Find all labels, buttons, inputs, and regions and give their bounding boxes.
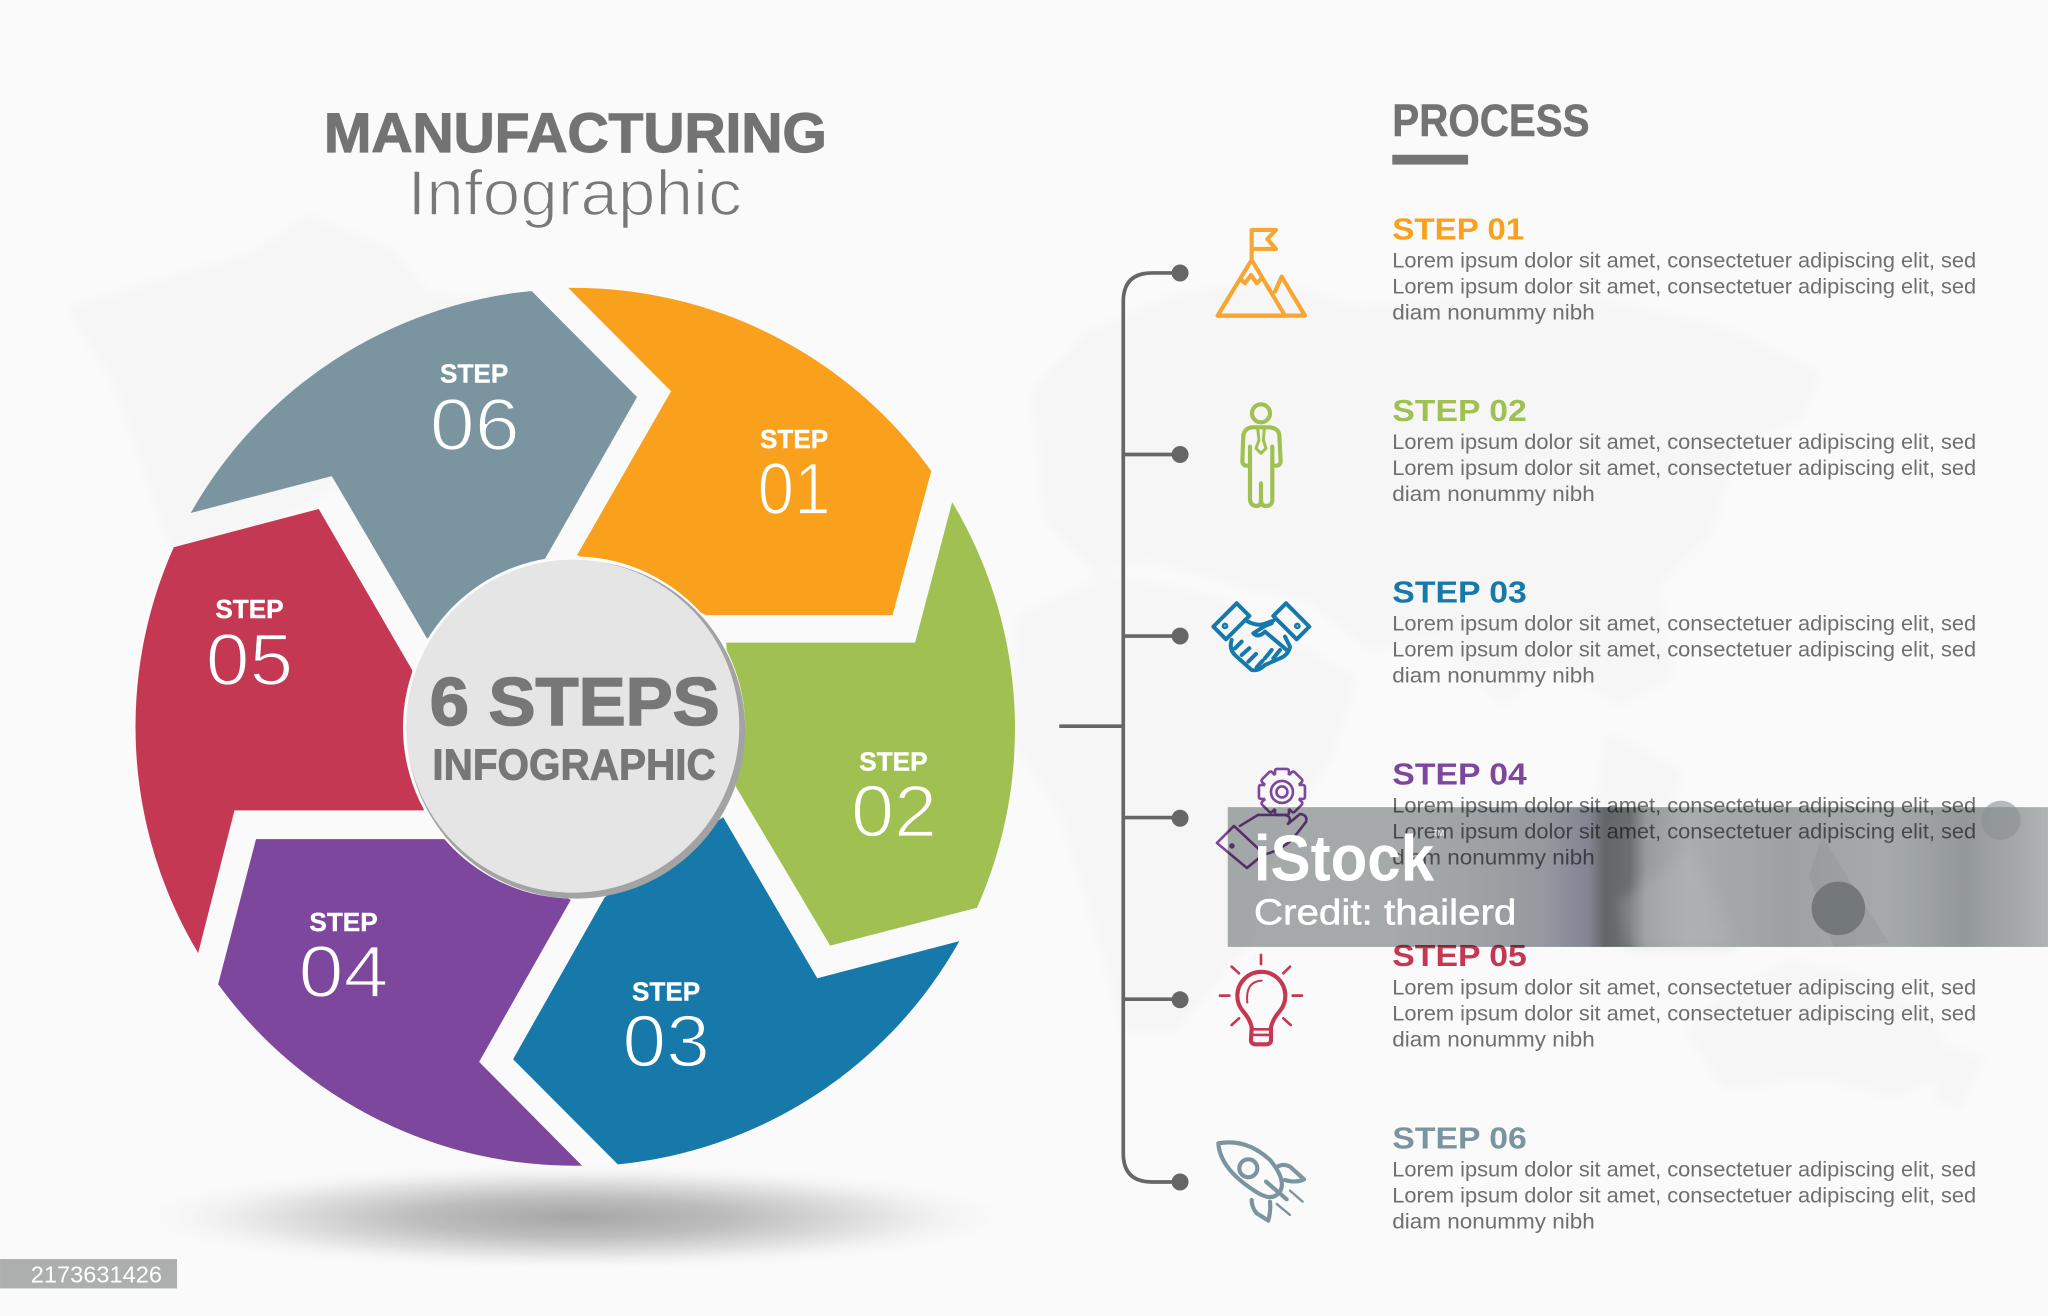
title: Infographic <box>408 157 742 229</box>
segment: step 02: 02 <box>851 772 937 853</box>
step 01 text: STEP 01 <box>1392 212 1524 247</box>
icon: businessman <box>1242 404 1281 506</box>
step 02 text: diam nonummy nibh <box>1392 481 1595 506</box>
step 01 text <box>1392 212 1976 325</box>
process heading: PROCESS <box>1392 95 1590 146</box>
step 04 text: STEP 04 <box>1392 756 1527 791</box>
step 03 text: STEP 03 <box>1392 575 1527 610</box>
segment: step 02 <box>726 502 1015 946</box>
step 03 text: Lorem ipsum dolor sit amet, consectetuer adipiscing elit, sed <box>1392 637 1976 662</box>
step 01 text: diam nonummy nibh <box>1392 300 1595 325</box>
step 05 text: Lorem ipsum dolor sit amet, consectetuer adipiscing elit, sed <box>1392 1000 1976 1025</box>
cycle diagram <box>136 288 1015 1166</box>
image id tag <box>0 1259 177 1288</box>
watermark band: iStock <box>1254 821 1435 894</box>
segment: step 04: STEP <box>309 907 378 937</box>
step 04 text: Lorem ipsum dolor sit amet, consectetuer adipiscing elit, sed <box>1392 818 1976 843</box>
segment: step 05: 05 <box>206 620 293 701</box>
segment: step 02: STEP <box>859 747 927 777</box>
step 05 text: Lorem ipsum dolor sit amet, consectetuer adipiscing elit, sed <box>1392 974 1976 999</box>
title <box>324 102 827 229</box>
step 04 text: Lorem ipsum dolor sit amet, consectetuer adipiscing elit, sed <box>1392 792 1976 817</box>
step 04 text: diam nonummy nibh <box>1392 845 1595 870</box>
segment: step 06: 06 <box>430 385 520 466</box>
step 06 text: Lorem ipsum dolor sit amet, consectetuer adipiscing elit, sed <box>1392 1156 1976 1181</box>
icon: light bulb <box>1220 955 1302 1044</box>
step 04 text <box>1392 756 1976 870</box>
step 06 text <box>1392 1121 1976 1234</box>
step 05 text <box>1392 938 1976 1052</box>
title: MANUFACTURING <box>324 102 827 164</box>
segment: step 03: STEP <box>632 976 700 1006</box>
center hub: 6 STEPS <box>430 665 720 740</box>
segment: step 04 <box>218 839 582 1166</box>
segment: step 01 <box>568 288 931 615</box>
center hub: INFOGRAPHIC <box>432 742 716 790</box>
step 05 text: STEP 05 <box>1392 938 1527 973</box>
segment: step 05 <box>136 509 424 953</box>
step 01 text: Lorem ipsum dolor sit amet, consectetuer adipiscing elit, sed <box>1392 273 1976 298</box>
watermark band: Credit: thailerd <box>1254 892 1516 933</box>
segment: step 04: 04 <box>298 932 389 1013</box>
segment: step 01: STEP <box>760 424 828 454</box>
connector tree <box>1059 264 1189 1190</box>
segment: step 05: STEP <box>215 594 284 624</box>
step 02 text: Lorem ipsum dolor sit amet, consectetuer adipiscing elit, sed <box>1392 455 1976 480</box>
step 05 text: diam nonummy nibh <box>1392 1027 1595 1052</box>
step 02 text: Lorem ipsum dolor sit amet, consectetuer adipiscing elit, sed <box>1392 429 1976 454</box>
ground shadow <box>124 1162 1025 1272</box>
segment: step 06 <box>191 291 637 639</box>
step 06 text: diam nonummy nibh <box>1392 1209 1595 1234</box>
segment: step 06: STEP <box>440 359 508 389</box>
icon: gear in hand <box>1217 769 1306 868</box>
step 01 text: Lorem ipsum dolor sit amet, consectetuer adipiscing elit, sed <box>1392 247 1976 272</box>
watermark band: TM <box>1433 829 1444 838</box>
icon: handshake <box>1213 603 1309 670</box>
world map backdrop <box>65 216 1985 1110</box>
icon: mountain flag <box>1218 230 1305 316</box>
step 03 text: diam nonummy nibh <box>1392 663 1595 688</box>
watermark band <box>1228 801 2048 947</box>
process heading <box>1392 95 1590 165</box>
icon: rocket <box>1218 1142 1304 1221</box>
step 02 text: STEP 02 <box>1392 393 1527 428</box>
step 03 text <box>1392 575 1976 688</box>
image id tag: 2173631426 <box>31 1262 162 1288</box>
segment: step 01: 01 <box>758 449 831 530</box>
step 02 text <box>1392 393 1976 506</box>
segment: step 03: 03 <box>622 1001 710 1082</box>
step 06 text: STEP 06 <box>1392 1121 1527 1156</box>
step 06 text: Lorem ipsum dolor sit amet, consectetuer adipiscing elit, sed <box>1392 1183 1976 1208</box>
step 03 text: Lorem ipsum dolor sit amet, consectetuer adipiscing elit, sed <box>1392 610 1976 635</box>
segment: step 03 <box>513 817 959 1164</box>
center hub <box>403 556 745 899</box>
